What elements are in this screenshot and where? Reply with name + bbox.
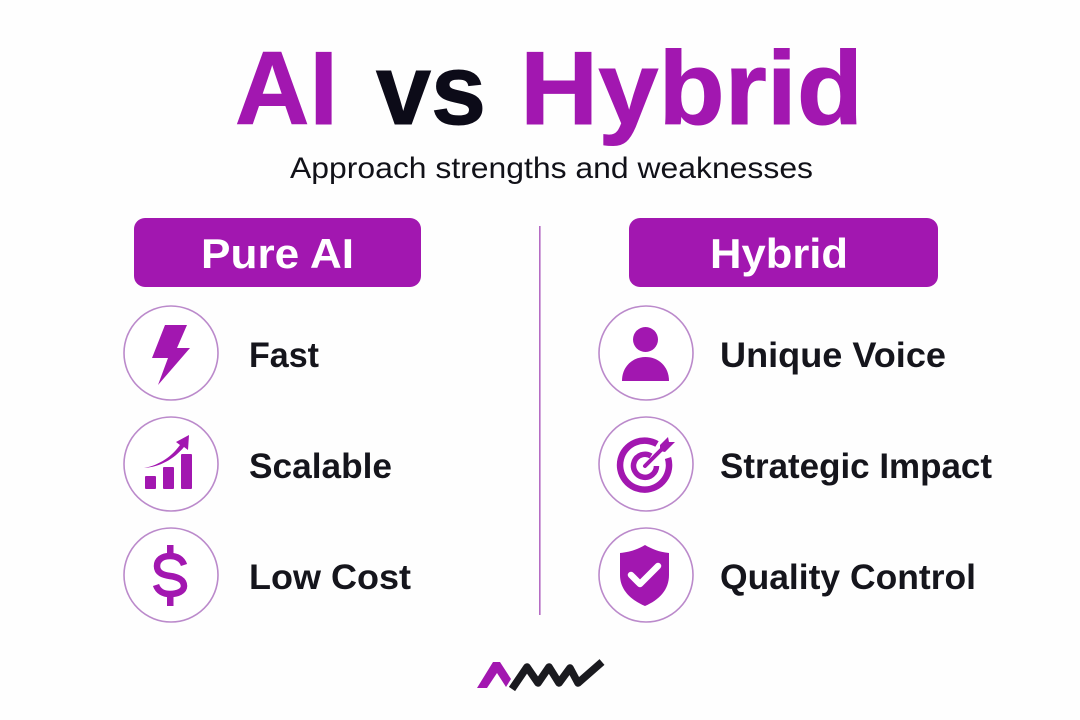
item: Unique Voice: Unique Voice	[720, 335, 946, 375]
heading: Pure AI: Pure AI	[201, 230, 354, 277]
title	[235, 31, 863, 147]
item: Low Cost: Low Cost	[249, 557, 411, 597]
item: Scalable	[124, 417, 392, 511]
item: Strategic Impact	[599, 417, 992, 511]
item: Fast: Fast	[249, 335, 319, 375]
panel: Pure AI	[124, 218, 421, 622]
title: vs	[376, 34, 486, 146]
title: AI	[235, 31, 338, 147]
item: Scalable: Scalable	[249, 446, 392, 486]
item: Quality Control	[599, 528, 976, 622]
subtitle: Approach strengths and weaknesses	[290, 152, 813, 185]
item: Unique Voice	[599, 306, 946, 400]
item: Quality Control: Quality Control	[720, 557, 976, 597]
heading: Hybrid: Hybrid	[710, 230, 848, 277]
item: Low Cost	[124, 528, 411, 622]
logo	[477, 662, 602, 689]
panel: Hybrid	[599, 218, 992, 622]
heading: Pure AI	[134, 218, 421, 287]
item: Fast	[124, 306, 319, 400]
item: Strategic Impact: Strategic Impact	[720, 446, 992, 486]
center divider	[539, 226, 541, 615]
heading: Hybrid	[629, 218, 938, 287]
title: Hybrid	[520, 31, 863, 147]
